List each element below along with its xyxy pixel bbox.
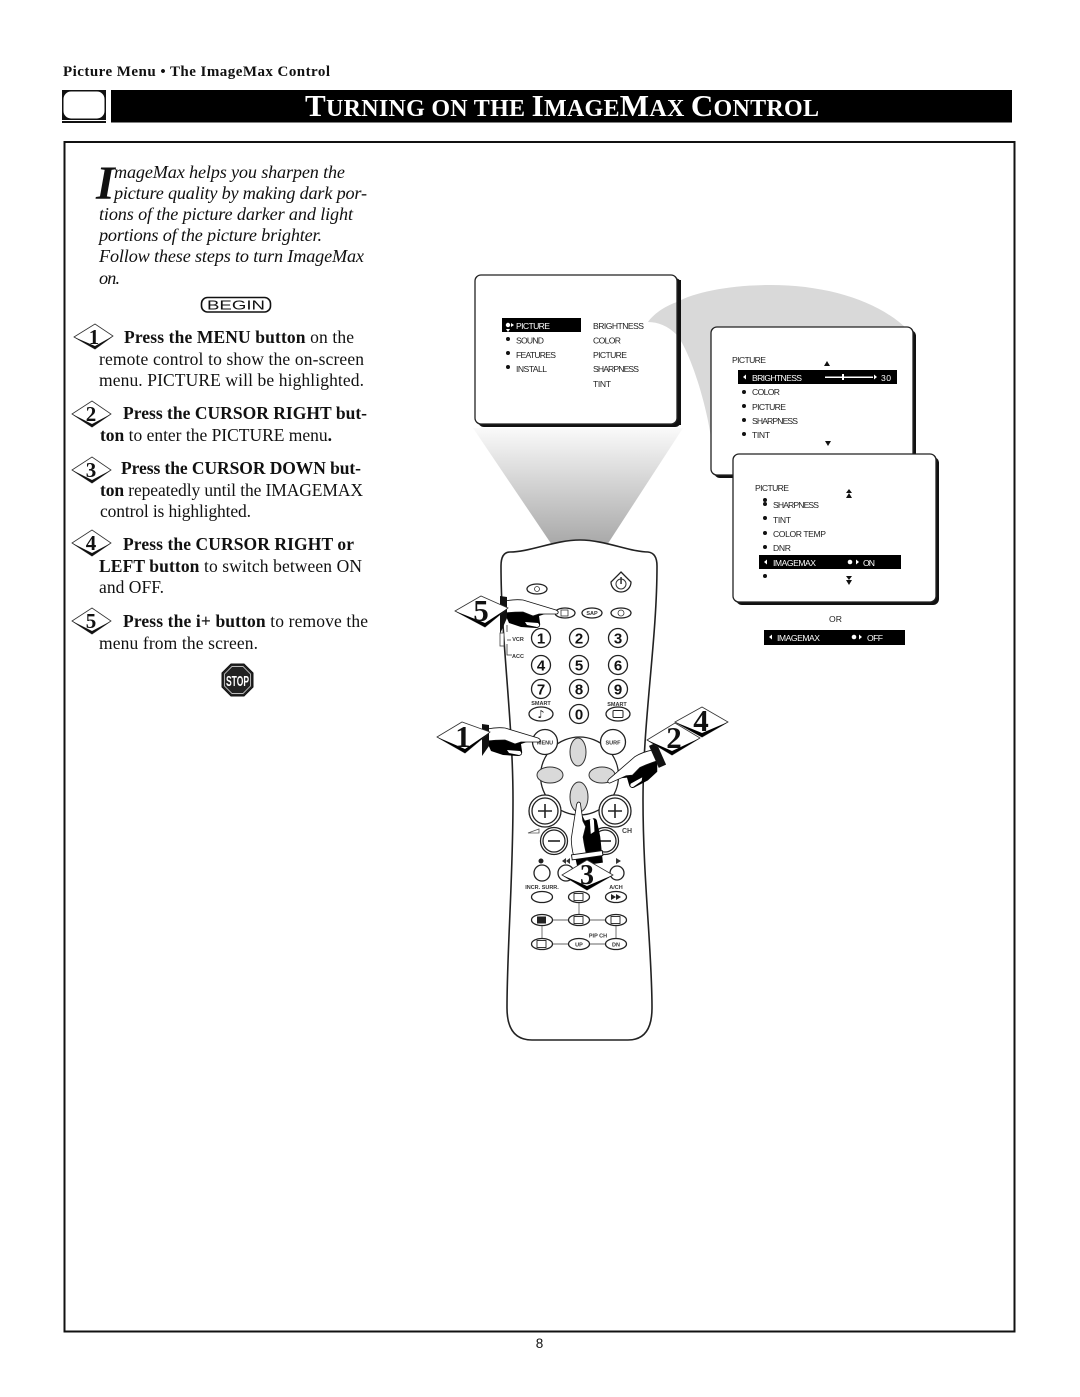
- number keypad: 8: [575, 682, 583, 698]
- number keypad: ♪: [537, 708, 545, 721]
- pip keys: UP: [575, 942, 583, 948]
- intro text block: I: [95, 157, 117, 210]
- number keypad: 4: [537, 658, 546, 674]
- volume and channel keys: CH: [622, 828, 632, 835]
- panel: picture menu screen: BRIGHTNESS: [752, 373, 802, 383]
- step 4: 4: [86, 531, 97, 555]
- side switch labels: ACC: [512, 654, 524, 660]
- intro text block: on.: [99, 268, 120, 288]
- step 3: [72, 457, 363, 521]
- step 3: ton repeatedly until the IMAGEMAX: [100, 480, 363, 500]
- pip keys: DN: [612, 942, 620, 948]
- callout diamond 3: 3: [580, 860, 594, 891]
- number keypad: SMART: [531, 701, 551, 707]
- begin badge: [202, 298, 270, 312]
- or label: OR: [829, 614, 842, 624]
- panel: picture menu screen: SHARPNESS: [752, 416, 798, 426]
- pointing hand: step 2 and 4: [601, 743, 669, 796]
- callout diamond 5: [455, 593, 508, 628]
- step 1: Press the MENU button on the: [124, 327, 354, 347]
- panel: picture menu screen: 30: [881, 373, 891, 383]
- transport keys: [525, 858, 624, 891]
- volume and channel keys: [528, 795, 632, 854]
- panel: main menu screen: [475, 275, 908, 470]
- number keypad: 7: [537, 682, 545, 698]
- panel: imagemax menu screen: ON: [863, 558, 875, 568]
- number keypad: 5: [575, 658, 583, 674]
- transport keys: INCR. SURR.: [525, 885, 559, 891]
- step 4: and OFF.: [99, 577, 164, 597]
- panel: picture menu screen: TINT: [752, 430, 771, 440]
- panel: picture menu screen: PICTURE: [732, 355, 766, 365]
- number keypad: 0: [575, 706, 583, 724]
- step 4: [72, 530, 362, 597]
- callout diamond 1: 1: [455, 719, 471, 754]
- panel: main menu screen: BRIGHTNESS: [593, 321, 644, 331]
- step 2: Press the CURSOR RIGHT but-: [123, 403, 367, 423]
- pointing hand: step 5: [500, 596, 558, 634]
- step 1: [74, 324, 364, 390]
- intro text block: Follow these steps to turn ImageMax: [98, 246, 364, 266]
- panel: main menu screen: FEATURES: [516, 350, 556, 360]
- panel: imagemax menu screen: [733, 454, 939, 605]
- callout diamond 1: [437, 719, 490, 754]
- number keypad: 6: [614, 658, 622, 674]
- panel: main menu screen: TINT: [593, 379, 612, 389]
- step 5: [72, 608, 368, 653]
- panel: imagemax menu screen: PICTURE: [755, 483, 789, 493]
- off state bar: OFF: [867, 633, 883, 643]
- icon: stop sign: [222, 664, 253, 696]
- pointing hand: step 1: [482, 724, 540, 756]
- cursor pad: [532, 730, 626, 815]
- step 5: menu from the screen.: [99, 633, 258, 653]
- callout diamond 2: 2: [666, 720, 682, 755]
- icon: stop sign: STOP: [226, 673, 249, 690]
- intro text block: portions of the picture brighter.: [97, 225, 322, 245]
- panel: imagemax menu screen: IMAGEMAX: [773, 558, 816, 568]
- panel: main menu screen: SOUND: [516, 336, 544, 346]
- breadcrumb heading: Picture Menu • The ImageMax Control: [63, 64, 330, 80]
- step 3: 3: [86, 458, 96, 482]
- begin badge: BEGIN: [207, 298, 265, 312]
- off state bar: IMAGEMAX: [777, 633, 820, 643]
- panel: main menu screen: PICTURE: [516, 321, 550, 331]
- intro text block: [95, 157, 367, 288]
- page number: 8: [536, 1336, 543, 1351]
- step 1: 1: [89, 325, 99, 349]
- number keypad: 1: [537, 630, 545, 648]
- callout diamond 3: [562, 860, 613, 891]
- callout diamond 4: [675, 703, 728, 738]
- title banner: [111, 88, 1012, 123]
- callout diamond 4: 4: [693, 703, 709, 738]
- step 3: Press the CURSOR DOWN but-: [121, 458, 361, 478]
- step 4: LEFT button to switch between ON: [99, 556, 362, 576]
- number keypad: 2: [575, 630, 583, 648]
- callout diamond 2: [647, 720, 700, 755]
- pip keys: PIP CH: [589, 934, 607, 940]
- step 3: control is highlighted.: [100, 501, 251, 521]
- grey swoosh behind screens: [648, 285, 908, 470]
- off state bar: [764, 630, 905, 645]
- panel: main menu screen: COLOR: [593, 336, 621, 346]
- function button row: SAP: [586, 611, 598, 617]
- intro text block: picture quality by making dark por-: [112, 183, 367, 203]
- step 2: ton to enter the PICTURE menu.: [100, 425, 332, 445]
- icon: tv set: [62, 90, 106, 123]
- step 2: 2: [86, 402, 96, 426]
- pointing hand: step 3: [564, 800, 604, 867]
- step 5: 5: [86, 609, 96, 633]
- side switch labels: VCR: [512, 637, 524, 643]
- step 4: Press the CURSOR RIGHT or: [123, 534, 354, 554]
- function button row: [555, 608, 631, 618]
- title banner: TURNING ON THE IMAGEMAX CONTROL: [305, 88, 819, 123]
- transport keys: A/CH: [609, 885, 623, 891]
- step 1: remote control to show the on-screen: [99, 349, 364, 369]
- panel: picture menu screen: PICTURE: [752, 402, 786, 412]
- step 5: Press the i+ button to remove the: [123, 611, 368, 631]
- panel: main menu screen: INSTALL: [516, 364, 547, 374]
- number keypad: 9: [614, 682, 622, 698]
- panel: content frame: [64, 142, 1014, 1332]
- intro text block: mageMax helps you sharpen the: [114, 162, 345, 182]
- remote control: [500, 540, 657, 1040]
- panel: picture menu screen: [711, 327, 916, 478]
- number keypad: [529, 628, 630, 724]
- step 2: [72, 401, 367, 445]
- cursor pad: MENU: [537, 740, 553, 746]
- callout diamond 5: 5: [473, 593, 489, 628]
- panel: main menu screen: SHARPNESS: [593, 364, 639, 374]
- panel: imagemax menu screen: DNR: [773, 543, 791, 553]
- step 1: menu. PICTURE will be highlighted.: [99, 370, 364, 390]
- intro text block: tions of the picture darker and light: [99, 204, 354, 224]
- number keypad: SMART: [607, 702, 627, 708]
- power buttons: [527, 572, 631, 594]
- projection beam: [473, 428, 683, 545]
- panel: picture menu screen: COLOR: [752, 387, 780, 397]
- side switch labels: [500, 625, 524, 660]
- cursor pad: SURF: [606, 740, 621, 746]
- panel: imagemax menu screen: TINT: [773, 515, 792, 525]
- panel: imagemax menu screen: SHARPNESS: [773, 500, 819, 510]
- panel: main menu screen: PICTURE: [593, 350, 627, 360]
- panel: imagemax menu screen: COLOR TEMP: [773, 529, 826, 539]
- number keypad: 3: [614, 630, 622, 648]
- pip keys: [532, 892, 626, 950]
